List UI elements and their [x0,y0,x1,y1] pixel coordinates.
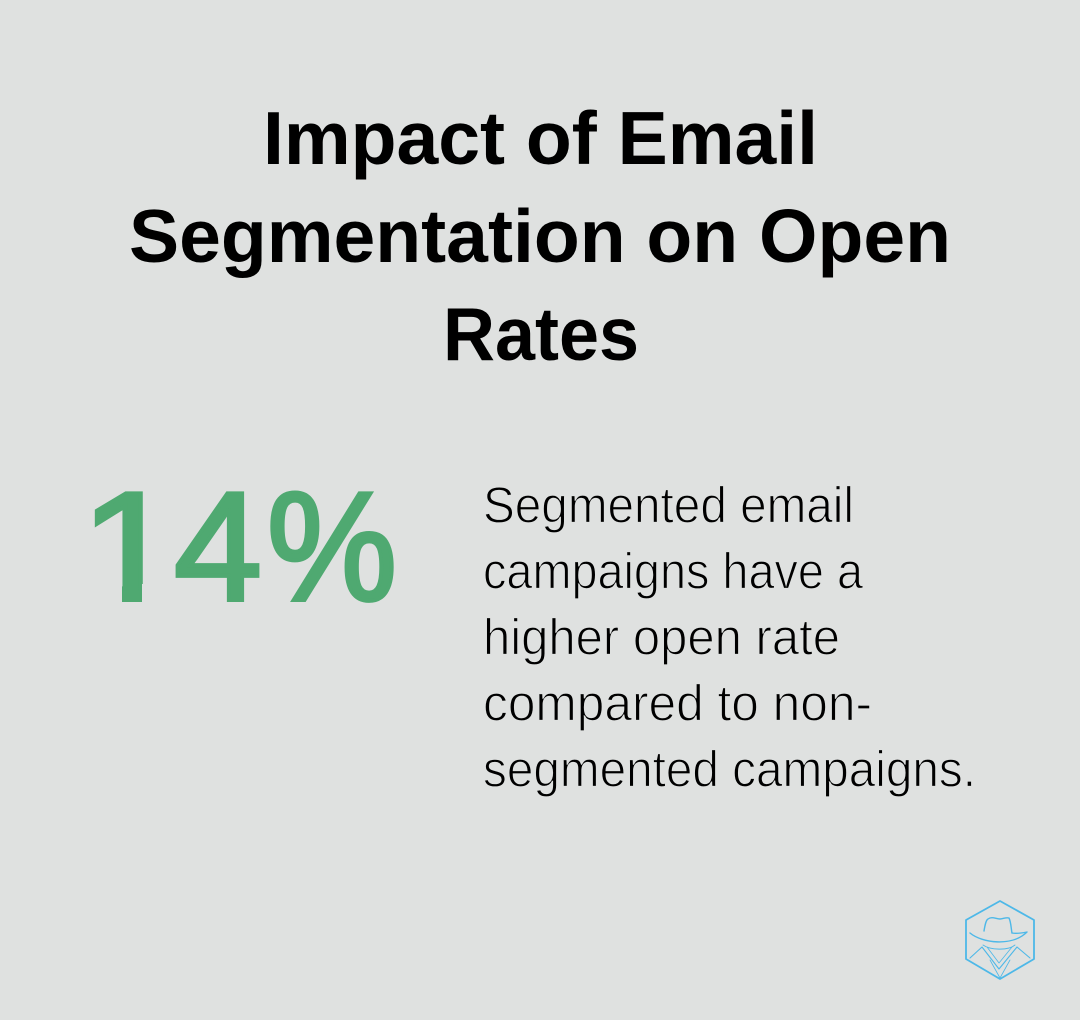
title: Segmentation on Open [129,194,951,278]
title [129,96,951,376]
infographic canvas [94,110,1035,980]
description text: higher open rate [483,608,840,666]
description text: compared to non- [483,674,872,732]
description text [483,476,976,798]
description text: Segmented email [483,476,854,534]
statistic: 14%: 1 [80,460,179,633]
description text: campaigns have a [483,542,864,600]
icon: logo hexagon with spy hat [966,901,1034,979]
title: Impact of Email [263,96,818,180]
statistic: 14%: % [267,460,397,633]
description text: segmented campaigns. [483,740,976,798]
statistic: 14% [94,490,394,603]
title: Rates [443,292,639,376]
statistic: 14%: 4 [174,460,262,633]
